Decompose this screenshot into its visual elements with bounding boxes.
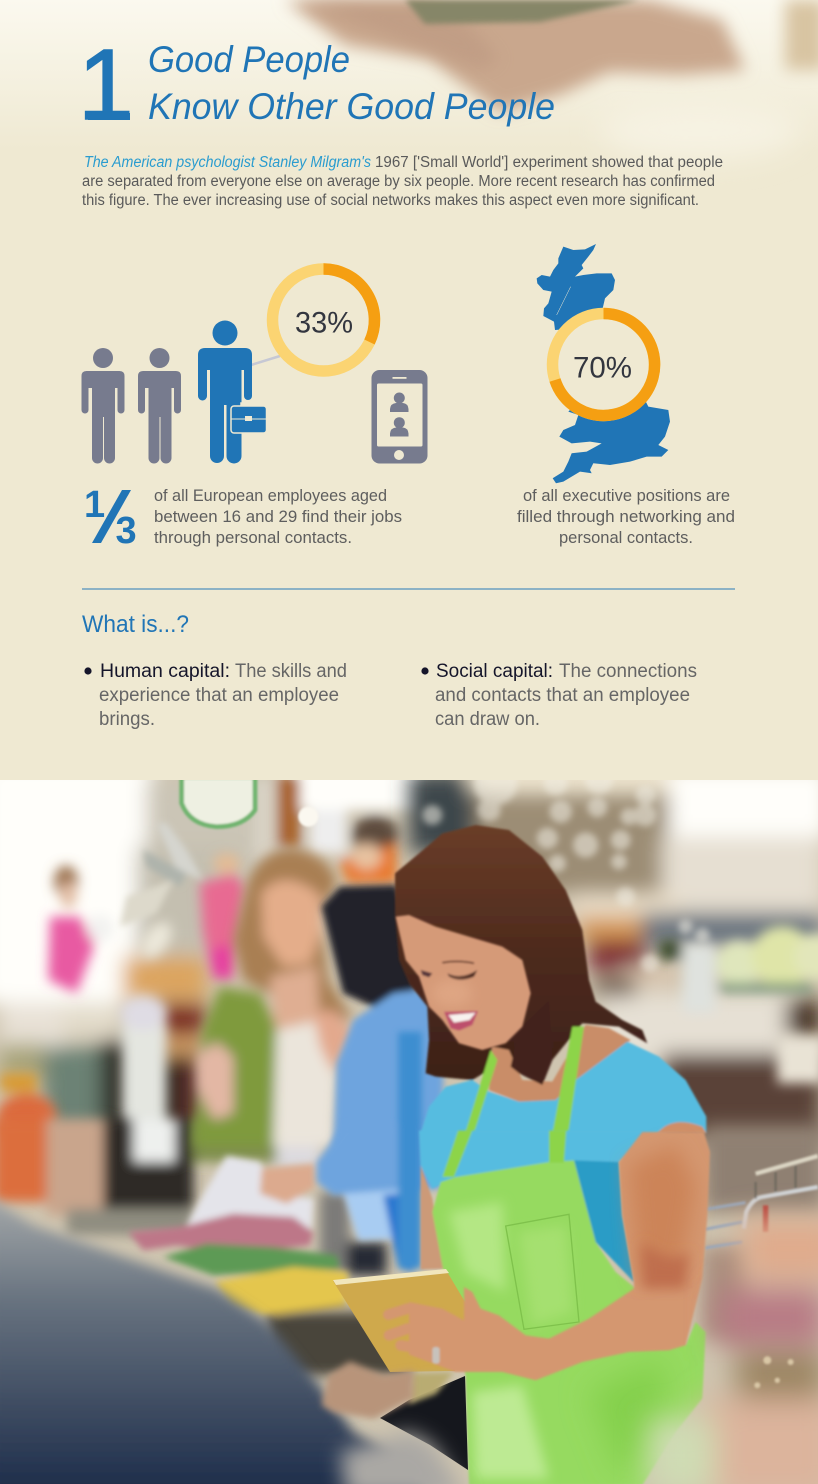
- definition: social capital: [421, 661, 697, 730]
- blurred foreground: pink hand at right: [649, 1219, 818, 1484]
- intro paragraph: [82, 154, 723, 209]
- fraction: one third: 1: [84, 484, 105, 526]
- definition: social capital: and contacts that an employee: [435, 685, 690, 706]
- shirt body: [418, 1129, 652, 1190]
- fraction: one third: [84, 484, 137, 552]
- background bottom-left: produce counter: [0, 1119, 410, 1375]
- intro paragraph: are separated from everyone else on average by six people. More recent research has confirmed: [82, 173, 715, 190]
- apron: [432, 1160, 706, 1484]
- background: cream page: [0, 0, 818, 780]
- apron highlights: [449, 1202, 572, 1479]
- icon: grey person two: [138, 348, 181, 464]
- blurred foreground shoulder: [0, 1195, 433, 1484]
- title: Good People: [148, 39, 350, 80]
- definition: human capital: [84, 661, 347, 730]
- intro paragraph: 1967 ['Small World'] experiment showed that people: [375, 154, 723, 171]
- held hand: [322, 1361, 413, 1419]
- definition: social capital: can draw on.: [435, 709, 540, 730]
- text: European employees: through personal contacts.: [154, 529, 352, 547]
- left arm: [421, 1165, 444, 1269]
- text: executive positions: [517, 487, 735, 547]
- donut chart: 70%: [552, 313, 655, 416]
- panel: executive positions statistic: [517, 244, 735, 547]
- definition: human capital: The skills and: [235, 661, 347, 682]
- header photo: blurred hands holding a book: [0, 0, 818, 160]
- text: executive positions: filled through networking and: [517, 508, 735, 526]
- text: European employees: between 16 and 29 find their jobs: [154, 508, 402, 526]
- shopping cart: [705, 1156, 818, 1248]
- background top-right: bokeh lights, fruit and tables: [409, 762, 818, 1140]
- dark area below tablet: [380, 1376, 468, 1470]
- shoppers: woman in green and person in blue: [193, 848, 353, 1147]
- foreground grey lower edge: [340, 1432, 467, 1484]
- donut chart: 33%: 33%: [295, 306, 353, 340]
- title: Know Other Good People: [148, 86, 555, 127]
- icon: blue person with briefcase: [198, 320, 266, 464]
- donut chart: 33%: [272, 269, 374, 371]
- definition: human capital: brings.: [99, 709, 155, 730]
- intro paragraph: this figure. The ever increasing use of social networks makes this aspect even more significant.: [82, 192, 699, 209]
- text: executive positions: personal contacts.: [559, 529, 693, 547]
- intro paragraph: The American psychologist Stanley Milgram's: [84, 154, 371, 171]
- map: United Kingdom: [537, 244, 670, 483]
- shopper's dark hair and blue shirt: [322, 885, 443, 1147]
- definition: social capital: Social capital:: [436, 661, 553, 682]
- definition: human capital: Human capital:: [100, 661, 230, 682]
- donut chart: 70%: 70%: [573, 352, 632, 384]
- number 1: 1: [78, 29, 134, 141]
- right arm and hand: [388, 1132, 710, 1380]
- arm top: [657, 1122, 706, 1133]
- heading: What is...?: What is...?: [82, 611, 189, 638]
- fraction: one third: 3: [116, 510, 137, 552]
- icon: grey person one: [82, 348, 124, 464]
- background top-left: stalls and shoppers: [0, 760, 423, 1147]
- shirt: [421, 1042, 706, 1133]
- definition: human capital: experience that an employee: [99, 685, 339, 706]
- background bottom-right: shopping cart and mid-tones: [702, 1125, 818, 1339]
- face: [396, 915, 531, 1050]
- definition: social capital: The connections: [559, 661, 697, 682]
- panel: one third statistic: [82, 269, 428, 552]
- tablet computer: [333, 1269, 477, 1404]
- text: European employees: of all European employees aged: [154, 487, 387, 505]
- text: executive positions: of all executive positions are: [523, 487, 730, 505]
- main woman: hair, face and shirt: [395, 825, 706, 1133]
- icon: smartphone with contacts: [372, 370, 428, 464]
- neck and chest: [489, 1025, 631, 1103]
- shopper's blue sleeve: [317, 1032, 447, 1272]
- title: [148, 39, 555, 127]
- connector line: [251, 356, 280, 365]
- text: European employees: [154, 487, 402, 547]
- apron straps: [552, 1027, 584, 1133]
- hair: [395, 825, 647, 1085]
- apron pocket: [506, 1214, 579, 1329]
- photo: shop worker with tablet in a market: [0, 760, 818, 1484]
- main woman: shirt, apron and arm: [419, 1131, 706, 1484]
